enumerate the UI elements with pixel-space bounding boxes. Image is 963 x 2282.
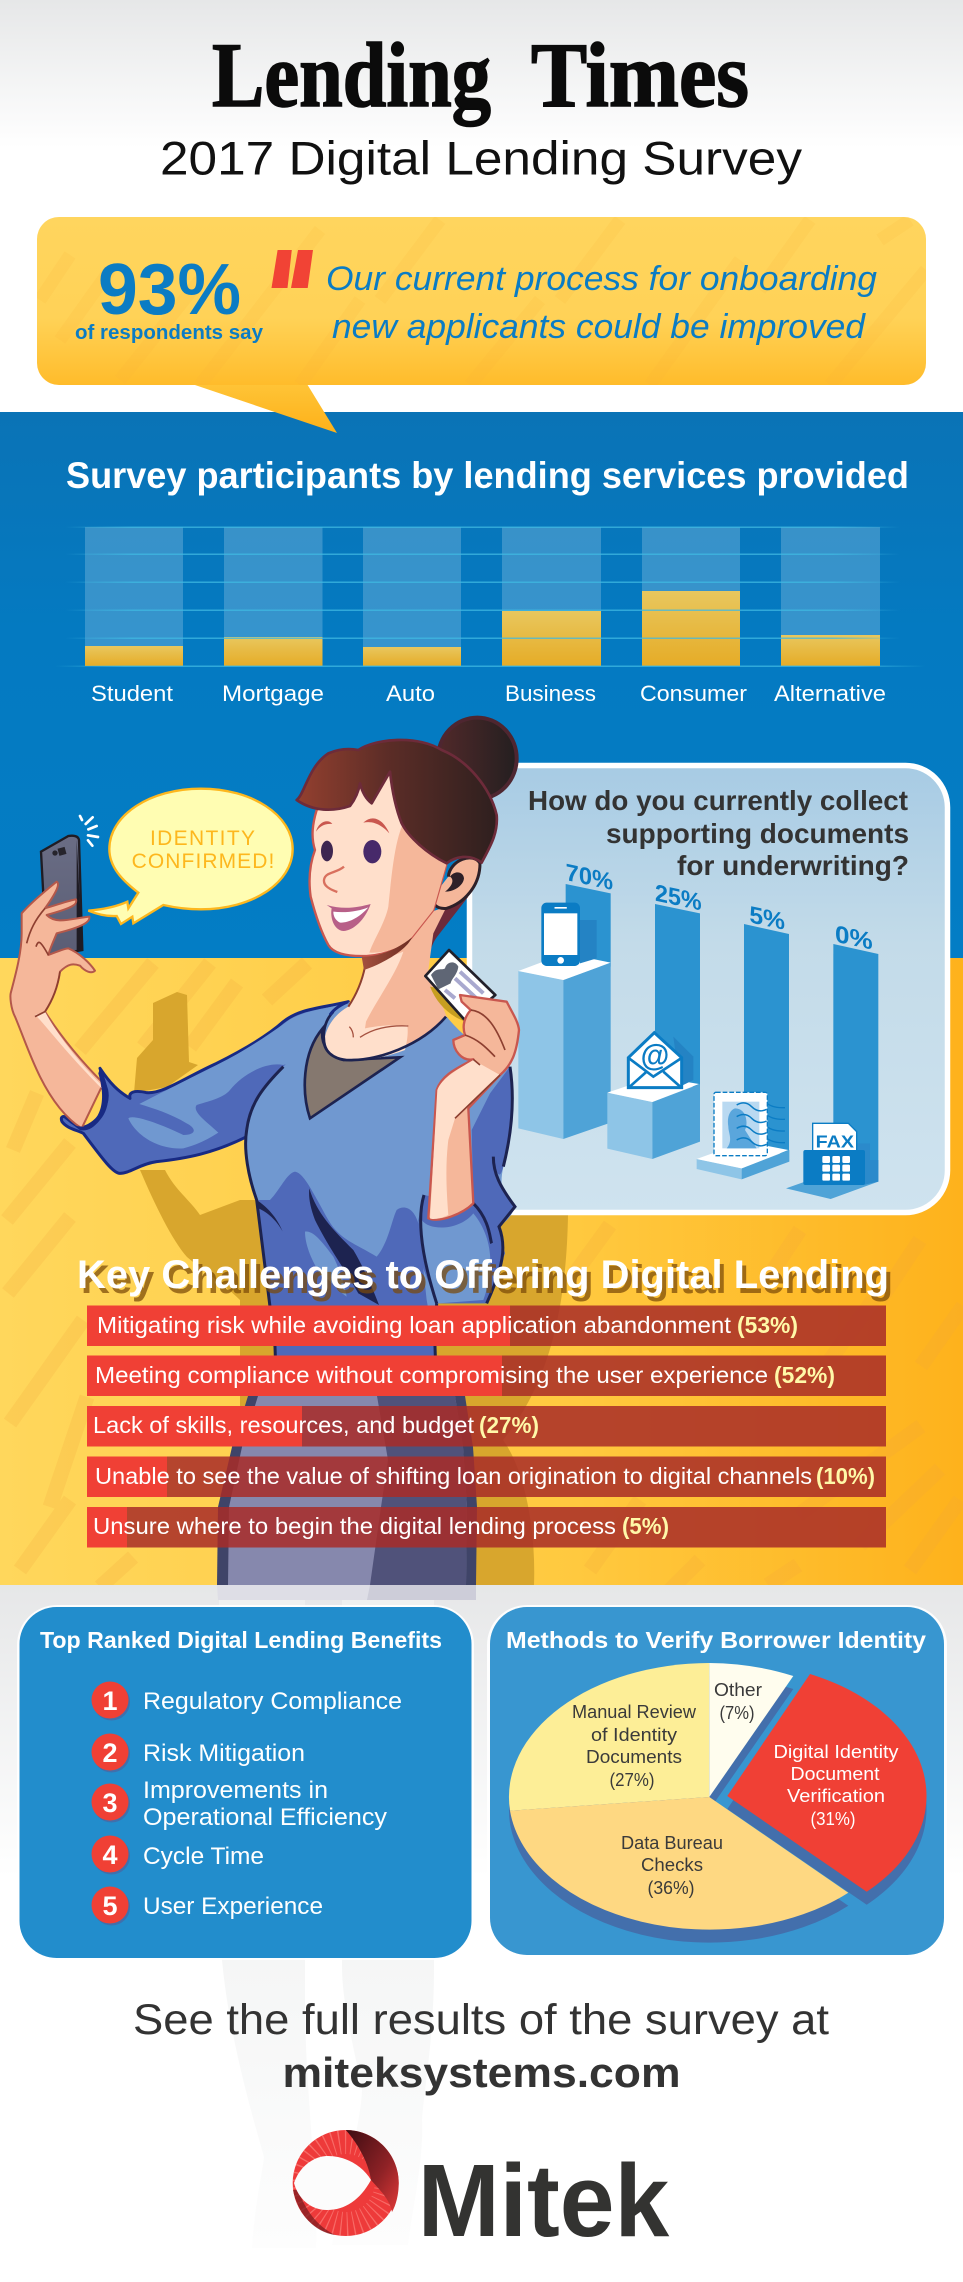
logo wordmark: Mitek	[418, 2143, 670, 2258]
panel: methods to verify identity	[487, 1605, 947, 1957]
speech bubble: identity confirmed: CONFIRMED!	[132, 850, 274, 873]
icon: email envelope: @	[641, 1039, 669, 1073]
subtitle: 2017 Digital Lending Survey	[160, 132, 803, 184]
row: skills 27%: Lack of skills, resources, and budget	[93, 1412, 475, 1438]
item 5	[92, 1886, 323, 1926]
face	[310, 767, 447, 970]
shadow silhouette of the woman on yellow	[134, 992, 568, 1585]
slice: data bureau	[510, 1797, 848, 1930]
grey undershirt in neck opening	[305, 1028, 400, 1118]
icon: quote marks	[272, 250, 313, 288]
heading: key challenges: Key Challenges to Offering Digital Lending	[81, 1258, 893, 1302]
label: other: (7%)	[720, 1703, 754, 1723]
item 3: Improvements in	[143, 1777, 328, 1804]
label: manual review: (27%)	[610, 1770, 654, 1790]
item 2: Risk Mitigation	[143, 1740, 305, 1767]
row: value 10%: Unable to see the value of shifting loan origination to digital channels	[95, 1463, 812, 1489]
label: digital identity	[774, 1742, 898, 1829]
slice: manual review	[509, 1663, 709, 1811]
speech bubble: identity confirmed: IDENTITY	[150, 827, 255, 850]
chart: document collection methods: 0%	[835, 921, 873, 956]
label: manual review: Documents	[586, 1747, 682, 1767]
panel: document collection	[470, 766, 948, 1212]
neck and chest	[324, 907, 447, 1061]
label: data bureau: Checks	[641, 1855, 703, 1875]
benefits heading: Top Ranked Digital Lending Benefits	[40, 1627, 442, 1653]
background: top header gradient	[0, 0, 963, 412]
question heading: for underwriting?	[677, 850, 909, 881]
call to action	[133, 1996, 829, 2096]
methods heading: Methods to Verify Borrower Identity	[506, 1627, 926, 1653]
hand holding card	[428, 995, 519, 1220]
speech bubble: identity confirmed	[88, 789, 293, 924]
bar chart: lending services: Student	[91, 681, 173, 706]
hair bun	[438, 718, 517, 799]
item 1: Regulatory Compliance	[143, 1688, 402, 1715]
label: data bureau: (36%)	[648, 1878, 694, 1898]
item 2: 2	[102, 1738, 118, 1768]
item 4	[92, 1836, 264, 1874]
row: risk 53%: Mitigating risk while avoiding loan application abandonment	[97, 1312, 732, 1338]
title: Lending Times: Lending	[212, 24, 491, 126]
pedestal: 25%	[607, 1077, 700, 1159]
nose	[324, 867, 344, 892]
heading: survey participants: Survey participants by lending services provided	[66, 455, 909, 496]
pedestal: 5%	[697, 1142, 789, 1179]
label: other	[714, 1680, 762, 1723]
label: manual review: of Identity	[591, 1725, 677, 1745]
item 3: Operational Efficiency	[143, 1804, 388, 1831]
row: value 10%: (10%)	[816, 1463, 875, 1489]
eyes	[321, 841, 333, 861]
title: Lending Times	[212, 24, 749, 126]
item 4: Cycle Time	[143, 1843, 264, 1870]
background: blue survey band	[0, 412, 963, 958]
bar chart: lending services: Auto	[386, 681, 435, 706]
bar chart: lending services	[55, 526, 925, 706]
row: risk 53%: (53%)	[737, 1312, 798, 1338]
callout tail	[192, 384, 337, 433]
raised arm and hand holding phone	[10, 836, 108, 1130]
eyebrows	[316, 818, 389, 833]
bar chart: lending services: Business	[505, 681, 596, 706]
row: compliance 52%: (52%)	[774, 1362, 835, 1388]
call to action: miteksystems.com	[282, 2049, 680, 2096]
chart: document collection methods	[518, 859, 878, 1199]
row: risk 53%	[87, 1306, 886, 1346]
title: Lending Times: Times	[531, 24, 749, 126]
icon: smartphone	[541, 903, 597, 966]
mouth	[327, 904, 371, 931]
question heading	[528, 785, 909, 881]
label: data bureau: Data Bureau	[621, 1833, 723, 1853]
ear	[433, 858, 480, 908]
row: where to begin 5%: (5%)	[622, 1513, 669, 1539]
background: lower grey-to-white area	[0, 1585, 963, 2282]
bar chart: lending services: Alternative	[774, 681, 886, 706]
label: digital identity: Verification	[787, 1786, 885, 1806]
bar chart: lending services: Mortgage	[222, 681, 324, 706]
question heading: supporting documents	[606, 818, 909, 849]
blouse body	[245, 1002, 515, 1396]
label: digital identity: (31%)	[810, 1809, 856, 1829]
pedestal: 70%	[518, 955, 611, 1139]
label: digital identity: Digital Identity	[774, 1742, 898, 1762]
item 4: 4	[102, 1840, 118, 1870]
row: skills 27%	[87, 1406, 886, 1446]
icon: fax machine	[803, 1123, 878, 1185]
pedestal: 0%	[786, 1172, 878, 1199]
item 1: 1	[102, 1686, 118, 1716]
label: data bureau	[621, 1833, 723, 1898]
slice: digital identity	[727, 1674, 926, 1892]
row: value 10%	[87, 1456, 886, 1497]
faded legs in lower section	[217, 1585, 476, 2248]
label: other: Other	[714, 1680, 762, 1700]
skirt	[217, 1396, 477, 1585]
challenge bars	[87, 1306, 886, 1548]
panel: top ranked benefits	[17, 1605, 474, 1960]
quote text: new applicants could be improved	[332, 308, 866, 346]
chart: document collection methods: 25%	[655, 880, 702, 917]
row: compliance 52%	[87, 1356, 886, 1396]
bar chart: lending services: Consumer	[640, 681, 747, 706]
question heading: How do you currently collect	[528, 785, 908, 816]
big 93%: 93%	[98, 250, 241, 330]
phone	[41, 836, 82, 957]
hair	[297, 740, 497, 863]
row: skills 27%: (27%)	[479, 1412, 539, 1438]
pie chart	[509, 1663, 926, 1943]
quote text: Our current process for onboarding	[326, 260, 877, 298]
back hair under ear	[426, 897, 468, 970]
signal sparks	[80, 816, 98, 846]
icon: fax machine: FAX	[816, 1131, 854, 1151]
label: manual review: Manual Review	[572, 1702, 697, 1722]
call to action: See the full results of the survey at	[133, 1996, 829, 2044]
slice: other	[709, 1663, 793, 1797]
label: manual review	[572, 1702, 697, 1790]
illustration: woman taking a selfie	[10, 718, 519, 1396]
item 3	[92, 1777, 388, 1831]
item 5: 5	[102, 1891, 118, 1921]
row: where to begin 5%: Unsure where to begin the digital lending process	[93, 1513, 616, 1539]
logo mark	[293, 2130, 399, 2236]
icon: email envelope	[628, 1033, 693, 1088]
item 3: 3	[102, 1788, 118, 1818]
label: digital identity: Document	[790, 1764, 880, 1784]
chart: document collection methods: 70%	[566, 859, 613, 896]
quote text	[326, 260, 877, 346]
item 1	[92, 1682, 402, 1720]
of respondents say: of respondents say	[75, 322, 264, 344]
chart: document collection methods: 5%	[749, 902, 785, 936]
row: where to begin 5%	[87, 1507, 886, 1548]
row: compliance 52%: Meeting compliance without compromising the user experience	[95, 1362, 768, 1388]
ID card	[425, 950, 495, 1022]
callout: 93% of respondents	[37, 217, 926, 433]
icon: postage stamp	[714, 1092, 785, 1156]
background: yellow challenge band	[0, 958, 963, 1585]
item 5: User Experience	[143, 1893, 323, 1920]
heading: key challenges: Key Challenges to Offering Digital Lending	[77, 1253, 889, 1297]
sleeve and arm of blouse	[61, 1002, 348, 1173]
item 2	[92, 1734, 305, 1772]
logo: Mitek	[293, 2130, 670, 2258]
